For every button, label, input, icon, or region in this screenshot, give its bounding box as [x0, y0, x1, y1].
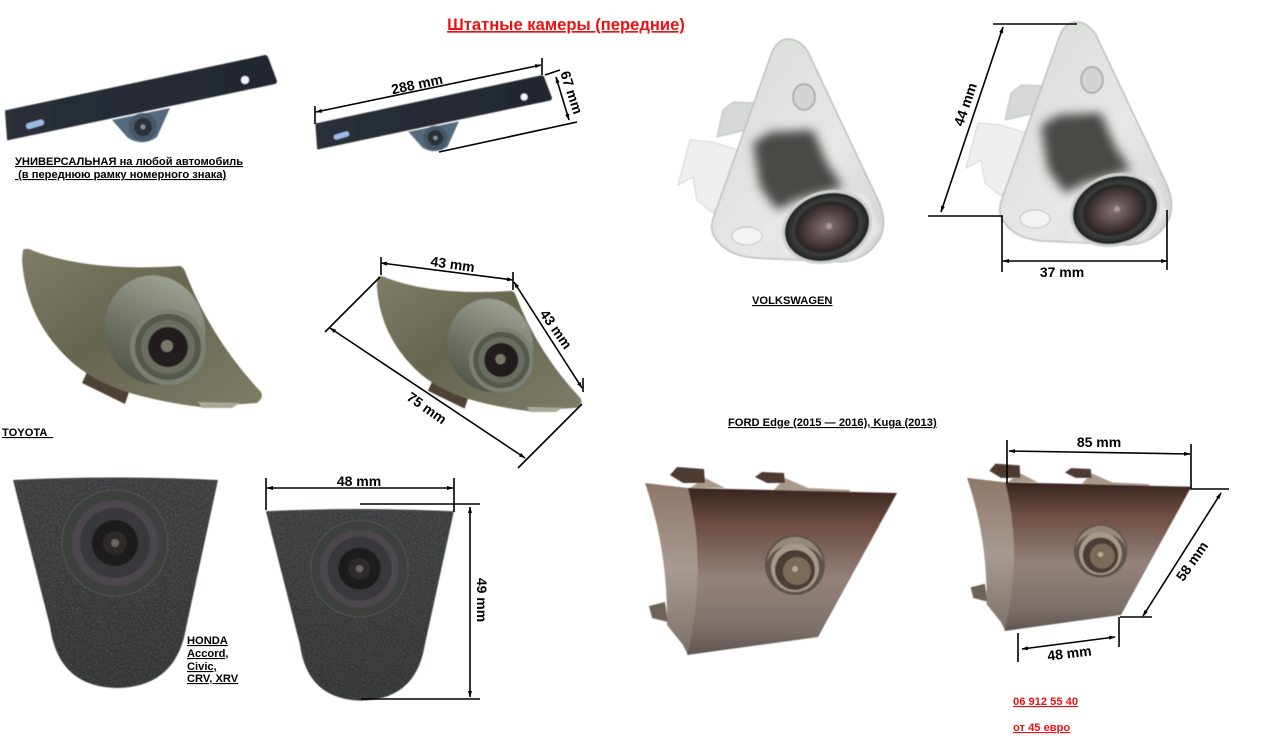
photo: Ford camera: [645, 467, 897, 655]
photo: Toyota camera: [22, 249, 262, 408]
caption: Honda models: [187, 635, 239, 685]
panel: universal camera dimensions: [315, 58, 586, 152]
dimension label: 43 mm side: 43 mm: [537, 306, 575, 352]
caption: universal second line: (в переднюю рамку номерного знака): [15, 169, 226, 181]
dimension label: 67 mm: 67 mm: [557, 69, 586, 116]
caption: Honda models: CRV, XRV: [187, 673, 239, 685]
dimension lines: 43, 43 and 75 mm: [325, 257, 583, 468]
photo: Honda camera: [13, 478, 218, 688]
dimension label: 44 mm: 44 mm: [950, 81, 980, 128]
panel: Honda camera: [13, 478, 239, 688]
caption: Toyota: TOYOTA: [2, 427, 53, 439]
panel: universal camera: [5, 55, 277, 181]
photo: universal bracket camera: [5, 55, 277, 142]
caption: Volkswagen: VOLKSWAGEN: [752, 295, 832, 307]
panel: Volkswagen camera: [678, 39, 884, 307]
dimension lines: 44 and 37 mm: [928, 24, 1167, 272]
panel: Toyota dimensions: [325, 253, 583, 468]
photo: Honda camera copy: [266, 509, 454, 701]
caption: Honda models: Civic,: [187, 661, 217, 673]
caption: Honda models: Accord,: [187, 648, 228, 660]
contact: phone: 06 912 55 40: [1013, 696, 1078, 708]
photo: Ford camera copy: [967, 464, 1191, 631]
dimension label: 43 mm top: 43 mm: [430, 253, 476, 275]
dimension lines: 48 and 49 mm: [266, 478, 480, 699]
dimension label: 75 mm: 75 mm: [404, 389, 450, 427]
panel: Honda dimensions: [266, 473, 490, 701]
dimension label: 85 mm: 85 mm: [1077, 434, 1121, 450]
photo: Toyota camera copy: [377, 276, 581, 412]
caption: Ford: FORD Edge (2015 — 2016), Kuga (2013): [728, 417, 937, 429]
photo: Volkswagen camera: [678, 39, 884, 275]
dimension label: 48 mm: 48 mm: [337, 473, 381, 489]
dimension label: 37 mm: 37 mm: [1040, 264, 1084, 280]
panel: Ford camera: [645, 417, 937, 655]
panel: Ford dimensions: [967, 434, 1229, 664]
dimension lines: 288 and 67 mm: [315, 58, 577, 152]
dimension label: 49 mm: 49 mm: [474, 578, 490, 622]
dimension label: 48 mm: 48 mm: [1046, 642, 1092, 664]
contact: price: от 45 евро: [1013, 722, 1070, 734]
caption: universal: УНИВЕРСАЛЬНАЯ на любой автомобиль: [15, 156, 243, 168]
panel: Toyota camera: [2, 249, 262, 439]
caption: Honda models: HONDA: [187, 635, 228, 647]
photo: Volkswagen camera copy: [966, 22, 1172, 258]
panel: Volkswagen dimensions: [928, 22, 1172, 280]
dimension label: 288 mm: 288 mm: [390, 71, 444, 97]
dimension label: 58 mm: 58 mm: [1173, 538, 1211, 584]
title: Штатные камеры (передние): [447, 15, 685, 34]
photo: bracket camera scaled: [315, 75, 552, 151]
dimension lines: 85, 58 and 48 mm: [1007, 440, 1229, 662]
